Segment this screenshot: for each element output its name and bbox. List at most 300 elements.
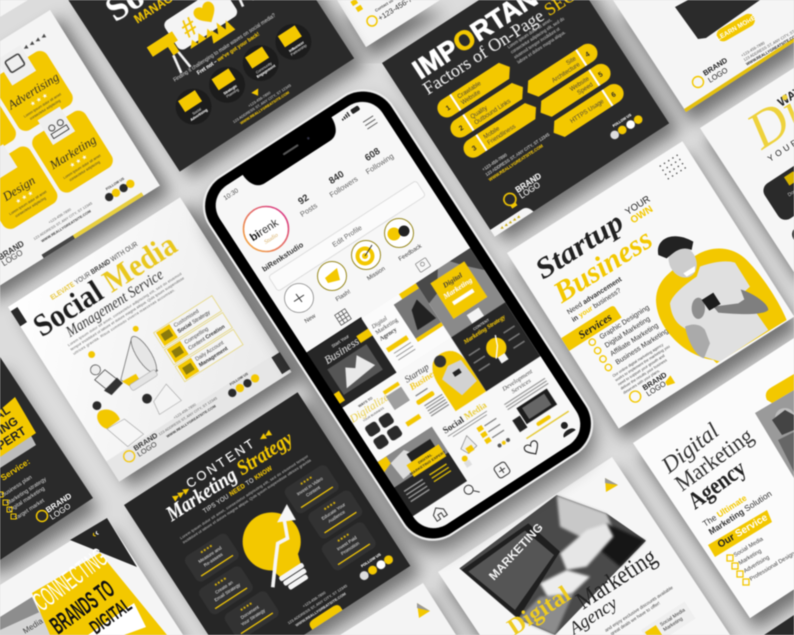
service list: Social Media [733, 536, 765, 559]
thumbnail: startup business [397, 337, 486, 427]
service box 2: Content Creation [187, 324, 226, 352]
follow us icons [355, 548, 395, 582]
text: tagline line two: Fret not – we've got your back! [196, 31, 261, 77]
pill 6: 6 [611, 91, 618, 99]
contact block: 123 ADDRESS ST, ANY CITY, ST 12345 [484, 132, 551, 177]
tile: marketing: Lorem ipsum dolor sit amet [63, 154, 101, 180]
avatar: Studio [263, 232, 280, 246]
highlight: flash [318, 262, 352, 303]
pill 2: 2 [458, 125, 465, 133]
phone screen [207, 93, 589, 537]
thumbnail: digital marketing expert: MARKETING EXPERT [409, 449, 447, 476]
contact block: 123 ADDRESS ST, ANY CITY, ST 12345 [286, 583, 348, 625]
banner: digital marketing expert [0, 397, 36, 465]
tile: audience: ★★★★ [322, 499, 337, 512]
text: intro: labore et dolore magna aliqua. [516, 30, 566, 65]
icon: megaphone [664, 375, 675, 387]
panel: startup business card [507, 141, 794, 428]
corner triangle [70, 518, 137, 567]
button: edit profile [268, 181, 426, 291]
contact block: WWW.REALLYGREATSITE.COM [294, 591, 347, 628]
yellow panel [32, 553, 167, 635]
tile: audience: Educate Your [321, 502, 347, 521]
text: small print [612, 340, 679, 395]
tile: design: Design [0, 173, 38, 204]
brand logo [627, 370, 673, 407]
thumbnail: development services: Services [510, 377, 533, 395]
photo: expert [0, 430, 36, 468]
tile: email: Email Strategy [213, 582, 242, 603]
pill 2: Outbound Links [474, 99, 512, 127]
status: time: 10:30 [222, 187, 240, 202]
thumbnail: start your business: Business [323, 336, 362, 367]
heading: agency: Agency [683, 456, 751, 515]
post grid [307, 248, 576, 517]
icon: yellow diamond [745, 14, 752, 21]
tile: advertising: consectetur adipiscing [29, 99, 61, 121]
dot grid [659, 154, 686, 180]
brand logo: LOGO [135, 439, 159, 459]
yellow pill [766, 374, 794, 403]
tile: video [283, 463, 341, 515]
service box 3: Daily Account [194, 340, 226, 363]
illustration: megaphone and people [64, 323, 189, 453]
thumbnail: digital marketing yellow: Marketing [440, 275, 474, 301]
stat: followers: Followers [328, 174, 360, 199]
icon: nav search [462, 482, 480, 499]
follow us icons: FOLLOW US [229, 372, 249, 387]
thumbnail: startup business: Startup [403, 361, 431, 384]
thumbnail: content strategy: CONTENT [473, 318, 491, 332]
services list: Graphic Designing [599, 304, 651, 341]
phone frame [189, 76, 607, 554]
tile: promotion: Invest Paid [336, 535, 358, 552]
tile: advertising: Advertising [5, 70, 62, 113]
tile: audience [306, 488, 364, 541]
contact block: 123 ADDRESS ST, ANY CITY, ST 12345 [158, 396, 218, 436]
contact block: WWW.REALLYGREATSITE.COM [240, 91, 290, 125]
thumbnail: social media: Social Media [441, 400, 489, 436]
thumbnail: start your business: Start Your [331, 333, 350, 349]
pill 5 [535, 60, 614, 121]
stat: posts [296, 192, 319, 219]
heading: connecting: CONNECTING [28, 542, 113, 617]
panel: digital marketing agency landscape card [438, 457, 730, 635]
illustration: social bubble [136, 0, 266, 81]
tile: design: Lorem ipsum dolor sit amet [9, 190, 47, 216]
pill 4: Architecture [551, 62, 582, 85]
phone [189, 76, 607, 554]
service list [0, 475, 48, 522]
brand logo [501, 171, 548, 210]
thumbnail: content strategy [451, 302, 540, 392]
tile: email: Create an [214, 580, 234, 595]
icon circles row: Strategic [223, 84, 238, 96]
panel: content marketing dark card [124, 392, 410, 635]
chevrons: ‹‹ [90, 528, 101, 541]
tile: email: ★★★★ [213, 575, 228, 587]
pill 2: Quality [470, 105, 489, 121]
pill 1: 1 [445, 105, 452, 113]
illustration: man with phone [656, 236, 787, 363]
icon circles row: Advertising [190, 108, 208, 122]
service tile: Marketing [662, 616, 684, 633]
thumbnail: ways to digitalize [342, 373, 432, 462]
tile: advertising [0, 36, 76, 134]
tab [271, 352, 291, 374]
bottom tab: ◄◄◄◄◄ [498, 214, 522, 232]
service box 1 [154, 296, 222, 348]
service list [727, 536, 794, 585]
tile: second dark tile [789, 216, 794, 257]
tile: marketing: Marketing [46, 133, 99, 173]
icon circles row: Engagement [256, 63, 277, 79]
service box 3: Management [198, 346, 229, 369]
service box 1: Customised [173, 309, 200, 329]
tab [11, 307, 27, 326]
pill 5: Website [569, 76, 591, 93]
tile: video: Content [305, 484, 322, 498]
service box 3 [175, 329, 243, 382]
text: small print: need to support your growth and [617, 354, 665, 387]
icon: nav home [431, 505, 447, 521]
icon circles row: Influencer [288, 40, 305, 53]
digital box [86, 594, 146, 635]
contact block: WWW.REALLYGREATSITE.COM [166, 404, 217, 439]
text: intro: eiusmod tempor incididunt ut [513, 26, 561, 60]
pill 6 [549, 80, 627, 141]
icon: light bulb with growth arrow [232, 499, 327, 600]
thumbnail: ways to digitalize: YOUR BUSINESS [362, 406, 385, 423]
text: intro: tempor incididunt ut labore et dolore magna aliqua. Quis ipsum suspendisse [69, 275, 185, 352]
text: in your business: in your business? [571, 287, 623, 324]
panel: connecting brands card [0, 518, 183, 635]
tile: marketing: ★ ★ ★ [68, 153, 89, 170]
panel: important SEO dark card [382, 0, 669, 237]
brand logo [0, 239, 30, 268]
highlight: new: New [304, 313, 318, 325]
panel: top right white card [613, 0, 794, 112]
avatar: birenk [248, 217, 281, 244]
tile: advertising: Lorem ipsum dolor sit amet [23, 92, 62, 119]
heading: marketing strategy: Marketing Strategy [161, 426, 297, 526]
text: need advancement: Need advancement [566, 276, 624, 316]
tile: audience: Audience [327, 509, 346, 524]
service list: Business plan [1, 475, 33, 499]
contact block: +123-456-7890 [301, 589, 327, 609]
tile: document: Your Strategy [240, 607, 267, 627]
heading: business: Business [547, 222, 658, 310]
tile: design: consectetur adipiscing [14, 196, 47, 218]
panel: bottom small card [340, 583, 456, 635]
button: learn more: LEARN MORE [716, 14, 757, 42]
thumbnail: startup business: Business [407, 365, 441, 393]
pill 3: Mobile [483, 126, 502, 141]
contact block: +123-456-7890 [740, 40, 766, 58]
pill 3: Friendliness [487, 124, 517, 147]
contact block: 123 ADDRESS ST, ANY CITY, ST 12345 [232, 84, 292, 124]
panel: top-left corner card [0, 0, 28, 17]
contact block: +123-456-7890 [48, 208, 72, 225]
tile: promotion: Promotion [340, 540, 361, 556]
thumbnail: content strategy: Marketing Strategy [462, 314, 507, 346]
phone notch [242, 116, 342, 191]
icon circles row: Social [192, 107, 202, 116]
thumbnail: digital marketing agency: Marketing [375, 318, 399, 336]
stat: followers: 840 [327, 169, 346, 187]
heading: your: YOUR [623, 194, 653, 218]
corner dark card [764, 615, 794, 635]
icon circles row: Community [255, 61, 273, 75]
phone bezel [192, 78, 604, 552]
tile: document: ★★★★ [239, 600, 254, 612]
photo label: marketing: MARKETING [486, 520, 546, 583]
banner: our service: Our Service [716, 512, 770, 551]
stat: posts: 92 [296, 192, 311, 207]
brand logo: BRAND [132, 430, 160, 453]
follow us icons: FOLLOW US [360, 552, 382, 568]
pill 3: 3 [471, 145, 478, 153]
brand logo: LOGO [0, 248, 25, 268]
photo: top right laptop [675, 0, 760, 39]
text: small print: deliver the results your business [620, 358, 668, 391]
text: intro: ultrices gravida. Risus commodo viverra maecenas accumsan. [72, 287, 176, 356]
tile: video: Invest in Video [296, 476, 324, 497]
panel: social media management dark card [67, 0, 369, 172]
icon circles row: Planning [226, 88, 240, 99]
banner: our service [708, 510, 772, 557]
heading: own: OWN [629, 204, 655, 226]
follow us icons [606, 109, 644, 141]
icon: triangle [417, 603, 430, 618]
thumbnail: development services [486, 356, 576, 446]
service list: Marketing strategy [6, 476, 48, 507]
services list: Affiliate Marketing [609, 322, 660, 358]
chevrons: ◄◄◄◄◄ [15, 32, 48, 57]
bottom strip [106, 352, 291, 482]
brand logo [120, 430, 164, 466]
pill 4: Site [566, 56, 578, 67]
text: small print: works to implement the marketing you [615, 345, 671, 382]
icon circles row [169, 17, 318, 131]
thumbnail: start your business [307, 318, 397, 408]
pill 2 [447, 79, 528, 141]
services list [588, 302, 670, 373]
brand logo: BRAND [514, 171, 543, 195]
contact block: +123-456-7890 [173, 403, 197, 420]
status: signal and battery [340, 105, 360, 121]
text: intro: incididunt ut labore et dolore magna aliqua. Quis ipsum suspendisse ultrices gravida [182, 457, 312, 545]
contact block: WWW.REALLYGREATSITE.COM [488, 143, 544, 182]
pill 5: Speed [577, 82, 594, 97]
photo: laptop and hands [459, 495, 646, 635]
service list: Digital marketing [8, 486, 46, 514]
thumbnail: digital marketing expert [378, 427, 467, 516]
service tile [641, 602, 696, 635]
text: marketing solution: Marketing Solution [707, 488, 774, 537]
contact block: WWW.REALLYGREATSITE.COM [41, 209, 92, 243]
brand logo: BRAND [44, 491, 74, 515]
service box 2 [164, 313, 232, 365]
banner: services [561, 305, 622, 351]
tile: measure: Measure and [197, 545, 223, 564]
heading: content: CONTENT [183, 436, 257, 491]
icon circles row: Partnership [290, 43, 308, 57]
text: small print: Our online digital marketing agency [612, 343, 664, 378]
brand logo [36, 491, 74, 522]
button: edit profile: Edit Profile [331, 225, 364, 249]
heading: tips: TIPS YOU NEED TO KNOW [202, 466, 274, 515]
pill 6: HTTPS Usage [570, 99, 606, 125]
highlight: feedback [384, 218, 424, 263]
text: intro [506, 11, 572, 65]
services list: Business Marketing [615, 328, 670, 366]
contact block [225, 73, 295, 128]
pill 5: 5 [597, 71, 605, 79]
contact block: 123 ADDRESS ST, ANY CITY, ST 12345 [33, 201, 93, 241]
grid divider [307, 317, 362, 354]
thumbnail: ways to digitalize: Digitalize [347, 391, 391, 426]
tile: document: Document [240, 604, 260, 620]
photo: media [0, 597, 50, 635]
tile: document [223, 589, 281, 635]
text: intro: Lorem ipsum dolor sit amet, consectetur adipiscing elit, sed do eiusmod tempor [179, 453, 310, 540]
camera [307, 137, 310, 140]
tile: design [0, 134, 61, 232]
pill 1: Website [461, 89, 482, 106]
pill 4: 4 [584, 51, 592, 59]
heading: startup: Startup [530, 206, 629, 286]
thumbnail: digital marketing expert: DIGITAL [417, 452, 433, 465]
contact block: +123-456-7890 [481, 152, 508, 172]
pill 3 [460, 99, 541, 161]
text: intro: Lorem ipsum dolor sit amet, [506, 17, 553, 50]
icon: menu [363, 115, 378, 129]
panel: digital marketing agency tall card [633, 338, 794, 618]
thumbnail: social media [432, 392, 521, 481]
heading: social media: Social Media [26, 226, 183, 344]
service list: Advertising [743, 555, 771, 575]
pill 1 [434, 59, 515, 121]
brand logo: LOGO [645, 379, 668, 398]
highlight: mission: Mission [366, 266, 387, 282]
tile: video: ★★★★ [299, 474, 314, 486]
illustration: social bubble: # [175, 11, 204, 44]
chevrons left: ▶▶▶ [171, 484, 192, 502]
bottom yellow tab [308, 603, 342, 630]
brand logo: LOGO [48, 502, 72, 522]
banner: services: Services [576, 311, 614, 342]
follow us icons: FOLLOW US [612, 113, 633, 128]
highlight: flash: Flash! [335, 289, 352, 303]
stat: following: Following [364, 152, 395, 176]
brand logo [692, 55, 730, 88]
tile: document [760, 154, 794, 223]
panel: ways to digitalize card [700, 0, 794, 272]
thumbnail: ways to digitalize: WAYS TO [358, 396, 374, 409]
pill 1: Crawlable [457, 81, 483, 101]
text: intro: Lorem ipsum dolor sit amet, consectetur adipiscing elit, sed do eiusmod [67, 271, 182, 347]
panel: social media management white card [8, 197, 292, 482]
icon: nav heart [523, 440, 542, 458]
stat: following: 608 [363, 146, 382, 164]
service list: Target market [14, 498, 46, 522]
panel: digital marketing expert dark card [0, 357, 93, 560]
tile: unnamed [0, 83, 19, 169]
heading: digital: Digital [656, 418, 723, 479]
tile: marketing: consectetur adipiscing [69, 160, 101, 182]
tile: measure: Re-assess [203, 551, 224, 568]
thumbnail: digital marketing agency [362, 283, 451, 373]
photo: bearded man [755, 390, 794, 478]
username: biRenkstudio [260, 240, 305, 274]
contact block: +123-456-7890 [247, 91, 271, 108]
tile: design: ★ ★ ★ [14, 189, 35, 206]
highlight: feedback: Feedback [398, 243, 424, 263]
text: discounts: and enjoy exclusive discounts available [604, 585, 674, 633]
brand logo: LOGO [518, 180, 542, 201]
icon: nav add [493, 461, 511, 479]
service list: Marketing [738, 548, 763, 567]
hatch strip [41, 192, 144, 258]
stat: posts: Posts [298, 201, 319, 219]
icon: tagged tab [415, 258, 431, 272]
text: intro: consectetur adipiscing elit, sed do [510, 16, 566, 55]
icon: triangle [605, 478, 618, 492]
service box 1: Social Strategy [177, 310, 212, 335]
text: small print: deserves with your plans. [623, 369, 661, 395]
service tile: Social Media [659, 607, 687, 628]
tile: marketing [22, 97, 116, 196]
heading: marketing: Marketing [670, 423, 758, 496]
pill 4 [522, 40, 601, 100]
tile: measure [183, 531, 241, 584]
thumbnail: digital marketing yellow: Digital [440, 270, 465, 291]
thumbnail: digital marketing yellow [416, 248, 505, 337]
highlight: new [284, 284, 318, 325]
icon: nav profile [557, 419, 576, 438]
brand logo: LOGO [706, 65, 730, 85]
brand logo: BRAND [641, 370, 669, 392]
follow us icons: FOLLOW US [105, 176, 126, 191]
tile: promotion: ★★★★ [336, 531, 351, 543]
services list: Digital Marketing [604, 316, 652, 350]
service box 2: Compelling [184, 326, 210, 346]
follow us icons [100, 173, 136, 203]
follow us icons [223, 368, 261, 399]
icon: grid tab [335, 309, 351, 325]
heading: management service: Management Service [62, 266, 167, 341]
speaker [283, 144, 299, 156]
thumbnail: digital marketing agency: Agency [379, 327, 398, 342]
thumbnail: digital marketing agency: Digital [370, 316, 389, 331]
heading: elevate: ELEVATE YOUR BRAND WITH OUR [48, 239, 140, 302]
tile: promotion [320, 520, 378, 572]
heading: marketing: Marketing [572, 543, 662, 615]
text: the ultimate: The Ultimate [701, 493, 749, 529]
tile: email [197, 564, 255, 616]
highlight: mission [352, 240, 387, 282]
tile: advertising: ★ ★ ★ [29, 92, 49, 108]
bottom tab [490, 205, 533, 237]
thumbnail: development services: Development [500, 368, 534, 393]
avatar [244, 206, 288, 252]
panel: services card with yellow tiles [0, 10, 160, 295]
text: tagline: Finding it challenging to make waves on social media? [173, 13, 277, 84]
chevrons right: ◀◀ [257, 428, 273, 443]
panel: top centre contact card [337, 0, 440, 47]
brand logo: BRAND [701, 55, 730, 78]
